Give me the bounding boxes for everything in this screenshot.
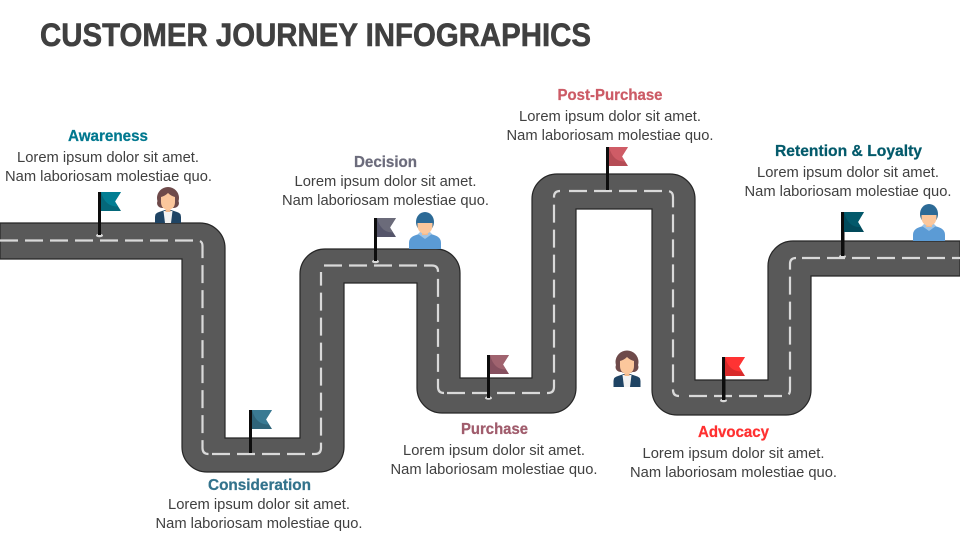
text block: decision [282, 154, 489, 209]
icon: woman near awareness [155, 187, 181, 223]
text block: consideration: Lorem ipsum dolor sit amet. [168, 497, 350, 513]
text block: decision: Lorem ipsum dolor sit amet. [294, 174, 476, 190]
text block: advocacy: Nam laboriosam molestiae quo. [630, 465, 837, 481]
flag: purchase [485, 355, 509, 400]
text block: decision: Nam laboriosam molestiae quo. [282, 193, 489, 209]
icon: man near decision [409, 212, 441, 249]
text block: post-purchase: Lorem ipsum dolor sit amet. [519, 109, 701, 125]
text block: post-purchase: Post-Purchase [558, 87, 663, 104]
text block: awareness: Awareness [68, 128, 148, 145]
text block: retention and loyalty: Nam laboriosam molestiae quo. [744, 184, 952, 200]
text block: awareness: Lorem ipsum dolor sit amet. [17, 150, 199, 166]
flag: consideration [249, 410, 272, 453]
flag: post-purchase [606, 147, 628, 190]
text block: post-purchase [506, 87, 714, 144]
text block: consideration [156, 477, 362, 532]
text block: decision: Decision [354, 154, 417, 171]
text block: awareness [5, 128, 212, 185]
text block: consideration: Nam laboriosam molestiae quo. [156, 516, 362, 532]
text block: advocacy: Lorem ipsum dolor sit amet. [642, 446, 824, 462]
text block: consideration: Consideration [208, 477, 311, 494]
text block: advocacy: Advocacy [698, 424, 769, 441]
icon: woman near advocacy [614, 350, 640, 387]
text block: retention and loyalty: Lorem ipsum dolor sit amet. [757, 165, 939, 181]
text block: retention and loyalty [744, 143, 952, 200]
title: CUSTOMER JOURNEY INFOGRAPHICS [40, 17, 591, 53]
text block: post-purchase: Nam laboriosam molestiae quo. [506, 128, 714, 144]
text block: purchase: Nam laboriosam molestiae quo. [390, 462, 598, 478]
winding road [0, 174, 960, 472]
flag: retention and loyalty [839, 212, 864, 258]
text block: purchase [390, 421, 598, 478]
text block: advocacy [630, 424, 837, 481]
flag: awareness [96, 192, 121, 237]
flag: decision [372, 218, 396, 263]
text block: awareness: Nam laboriosam molestiae quo. [5, 169, 212, 185]
text block: purchase: Lorem ipsum dolor sit amet. [403, 443, 585, 459]
icon: man near retention [913, 204, 945, 241]
text block: retention and loyalty: Retention & Loyalty [775, 143, 922, 160]
text block: purchase: Purchase [461, 421, 528, 438]
flag: advocacy [720, 357, 745, 402]
